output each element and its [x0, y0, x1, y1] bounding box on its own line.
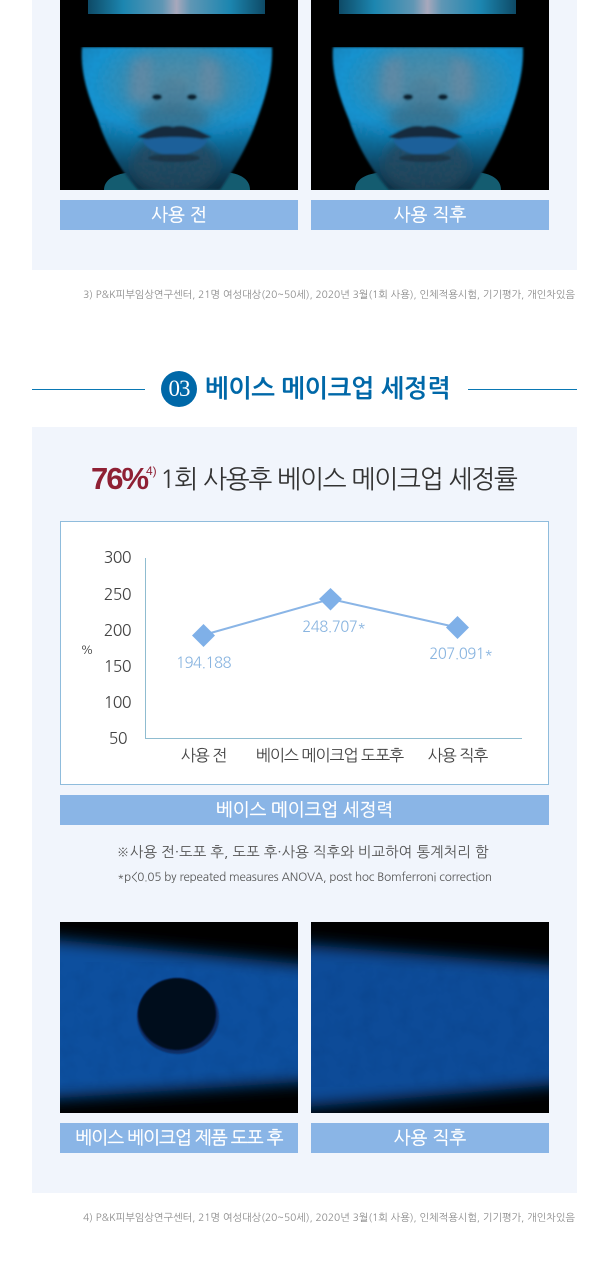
- label: after applying base makeup: 베이스 베이크업 제품 도포 후: [75, 1129, 283, 1147]
- statistical note: ※사용 전·도포 후, 도포 후·사용 직후와 비교하여 통계처리 함: [116, 846, 489, 860]
- section heading: [32, 371, 577, 407]
- superscript: 4): [146, 464, 157, 478]
- headline stat: [91, 461, 518, 496]
- y axis labels: 200: [104, 623, 131, 639]
- number badge: [161, 371, 197, 407]
- x axis labels: 사용 직후: [428, 747, 488, 764]
- y axis labels: 50: [109, 731, 127, 747]
- photo: arm right after use: [311, 922, 549, 1113]
- label: right after use: [311, 200, 549, 230]
- statistical note english: *p<0.05 by repeated measures ANOVA, post hoc Bomferroni correction: [117, 871, 492, 883]
- y axis labels: 150: [104, 659, 131, 675]
- label: right after use: [311, 1123, 549, 1153]
- axes: [146, 558, 522, 738]
- data line: [204, 599, 458, 635]
- line chart: [60, 521, 549, 785]
- y axis labels: 100: [104, 695, 131, 711]
- footnote 4: 4) P&K피부임상연구센터, 21명 여성대상(20~50세), 2020년 3월(1회 사용), 인체적용시험, 기기평가, 개인차있음: [83, 1213, 575, 1223]
- chart caption bar: [60, 795, 549, 825]
- y axis labels: 250: [104, 587, 131, 603]
- x axis labels: [181, 747, 488, 764]
- heading text: 베이스 메이크업 세정력: [205, 376, 450, 401]
- panel: base makeup cleansing: [32, 427, 577, 1193]
- y axis unit: %: [80, 644, 94, 656]
- stat description: 1회 사용후 베이스 메이크업 세정률: [160, 466, 517, 492]
- data values: 207.091*: [429, 647, 493, 662]
- label: before use: 사용 전: [151, 206, 207, 224]
- stat value: 76%: [91, 461, 147, 496]
- data values: 194.188: [176, 656, 231, 671]
- data values: [176, 620, 493, 671]
- photo: face right after use: [311, 0, 549, 190]
- x axis labels: 베이스 메이크업 도포후: [256, 747, 404, 764]
- data points: [192, 588, 469, 647]
- x axis labels: 사용 전: [181, 747, 226, 764]
- label: right after use: 사용 직후: [394, 206, 466, 224]
- y axis labels: [104, 550, 131, 747]
- data values: 248.707*: [302, 620, 366, 635]
- label: after applying base makeup: [60, 1123, 298, 1153]
- chart caption bar: 베이스 메이크업 세정력: [216, 801, 393, 819]
- footnote 3: 3) P&K피부임상연구센터, 21명 여성대상(20~50세), 2020년 3월(1회 사용), 인체적용시험, 기기평가, 개인차있음: [83, 290, 575, 300]
- panel: face comparison: [32, 0, 577, 270]
- label: before use: [60, 200, 298, 230]
- number badge: 03: [168, 376, 190, 401]
- photo: face before use: [60, 0, 298, 190]
- y axis labels: 300: [104, 550, 131, 566]
- label: right after use: 사용 직후: [394, 1129, 466, 1147]
- photo: arm with base makeup applied: [60, 922, 298, 1113]
